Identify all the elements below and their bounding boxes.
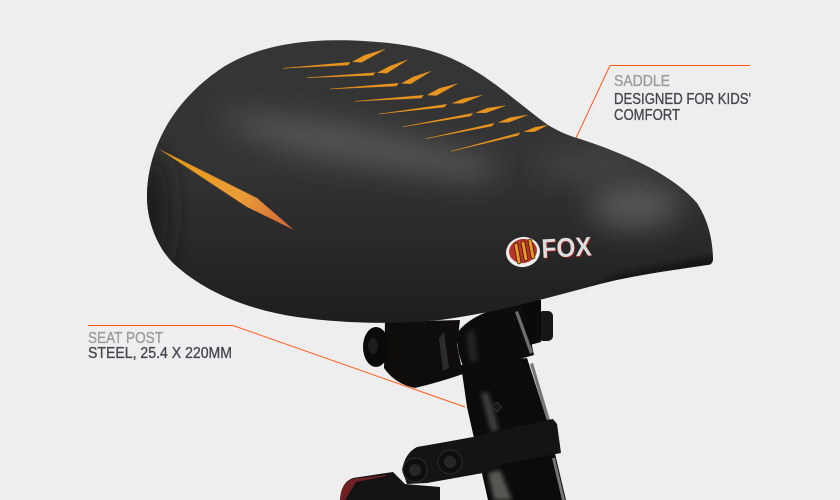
saddle body bbox=[147, 40, 713, 323]
logo: FOX bbox=[541, 231, 592, 264]
clamp head bbox=[384, 320, 463, 388]
logo badge bbox=[504, 234, 542, 270]
callout: seat post bbox=[88, 326, 465, 407]
description: DESIGNED FOR KIDS' bbox=[614, 91, 751, 108]
leader line bbox=[88, 326, 465, 407]
saddle clamp bbox=[363, 300, 553, 388]
nose tip edge bbox=[590, 256, 715, 288]
collar highlight bbox=[515, 311, 533, 354]
rear bolt bbox=[538, 311, 553, 341]
side stripe bbox=[159, 149, 294, 230]
bolts bbox=[403, 458, 427, 482]
tube highlights bbox=[530, 363, 550, 421]
band bbox=[402, 419, 561, 484]
central highlight bbox=[215, 115, 500, 180]
leader line bbox=[576, 66, 750, 138]
description: STEEL, 25.4 X 220MM bbox=[88, 345, 232, 362]
left edge shadow bbox=[147, 142, 173, 263]
lower tube bbox=[461, 358, 566, 500]
post marking bbox=[491, 402, 502, 412]
logo bbox=[504, 231, 593, 270]
rear light bbox=[340, 472, 440, 500]
upper collar bbox=[457, 300, 534, 373]
seat post bbox=[457, 300, 566, 500]
clamp bolt bbox=[363, 327, 389, 367]
nose highlight bbox=[590, 181, 680, 229]
label: SADDLE bbox=[614, 73, 670, 90]
top stripes bbox=[283, 49, 547, 151]
label: SEAT POST bbox=[88, 330, 163, 347]
illustration canvas bbox=[88, 40, 750, 500]
callout: saddle: COMFORT bbox=[614, 107, 680, 124]
callout: saddle bbox=[576, 66, 751, 138]
seat post clamp band bbox=[402, 419, 561, 484]
serrated edge bbox=[439, 332, 449, 371]
logo lettering bbox=[516, 241, 533, 262]
saddle bbox=[147, 40, 713, 323]
logo wordmark: FOX bbox=[542, 232, 593, 265]
